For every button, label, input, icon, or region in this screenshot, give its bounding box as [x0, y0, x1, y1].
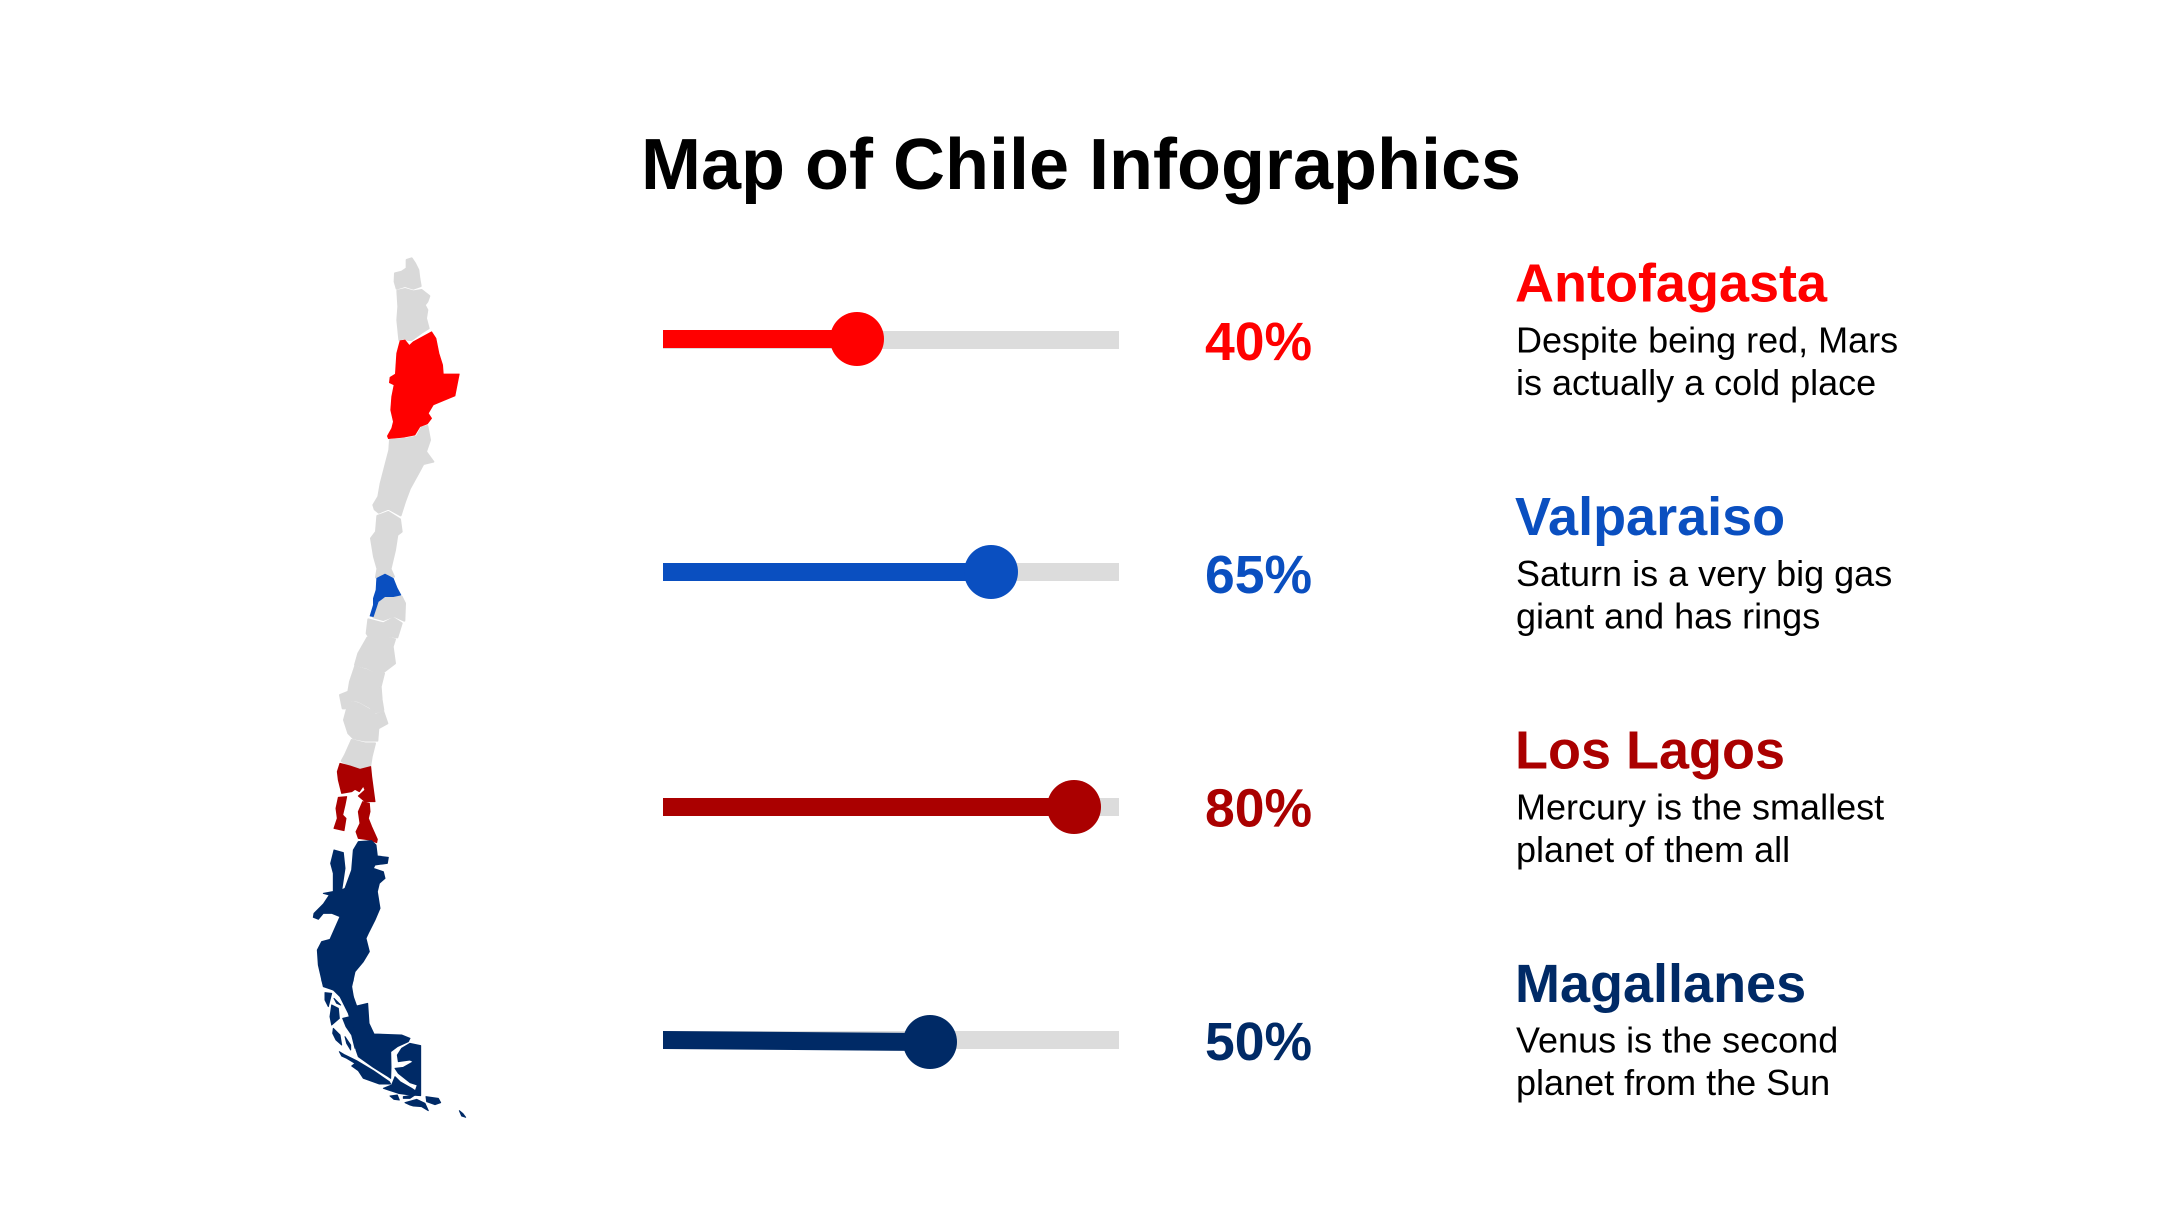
description: planet of them all [1516, 829, 1790, 870]
percentage: 65% [1205, 546, 1312, 605]
progress knob [1047, 780, 1101, 834]
map of Chile [313, 258, 466, 1117]
region: Magallanes [313, 841, 466, 1117]
region name: Valparaiso [1515, 487, 1785, 547]
row: Los Lagos [663, 720, 1884, 870]
description: Mercury is the smallest [1516, 786, 1884, 828]
progress track [663, 798, 1119, 816]
progress fill 40% [663, 330, 857, 348]
region name: Los Lagos [1515, 720, 1785, 780]
northern grey regions [373, 258, 433, 515]
percentage: 80% [1205, 780, 1312, 838]
progress knob [903, 1015, 957, 1069]
region: Antofagasta [387, 332, 459, 439]
percentage: 40% [1205, 313, 1312, 372]
southern tip and islands [322, 980, 466, 1117]
region name: Antofagasta [1515, 254, 1828, 314]
title: Map of Chile Infographics [641, 125, 1521, 205]
central grey regions [340, 512, 405, 769]
description: Saturn is a very big gas [1516, 553, 1892, 594]
description: giant and has rings [1516, 596, 1820, 636]
progress track [663, 331, 1119, 349]
region name: Magallanes [1515, 954, 1806, 1014]
progress track [663, 1031, 1119, 1049]
row: Valparaiso [663, 487, 1892, 636]
progress knob [830, 312, 884, 366]
progress knob [964, 545, 1018, 599]
description: Venus is the second [1516, 1020, 1838, 1060]
percentage: 50% [1205, 1013, 1312, 1072]
row: Antofagasta [663, 254, 1898, 403]
progress track [663, 563, 1119, 581]
row: Magallanes [663, 954, 1838, 1103]
northern Magallanes body [313, 841, 388, 997]
description: Despite being red, Mars [1516, 320, 1898, 360]
description: planet from the Sun [1516, 1062, 1830, 1103]
progress fill 50% [663, 1031, 930, 1051]
progress fill 65% [663, 563, 991, 581]
progress fill 80% [663, 798, 1074, 816]
region: Los Lagos [334, 763, 377, 843]
region: Valparaiso [370, 574, 401, 617]
description: is actually a cold place [1516, 362, 1876, 403]
